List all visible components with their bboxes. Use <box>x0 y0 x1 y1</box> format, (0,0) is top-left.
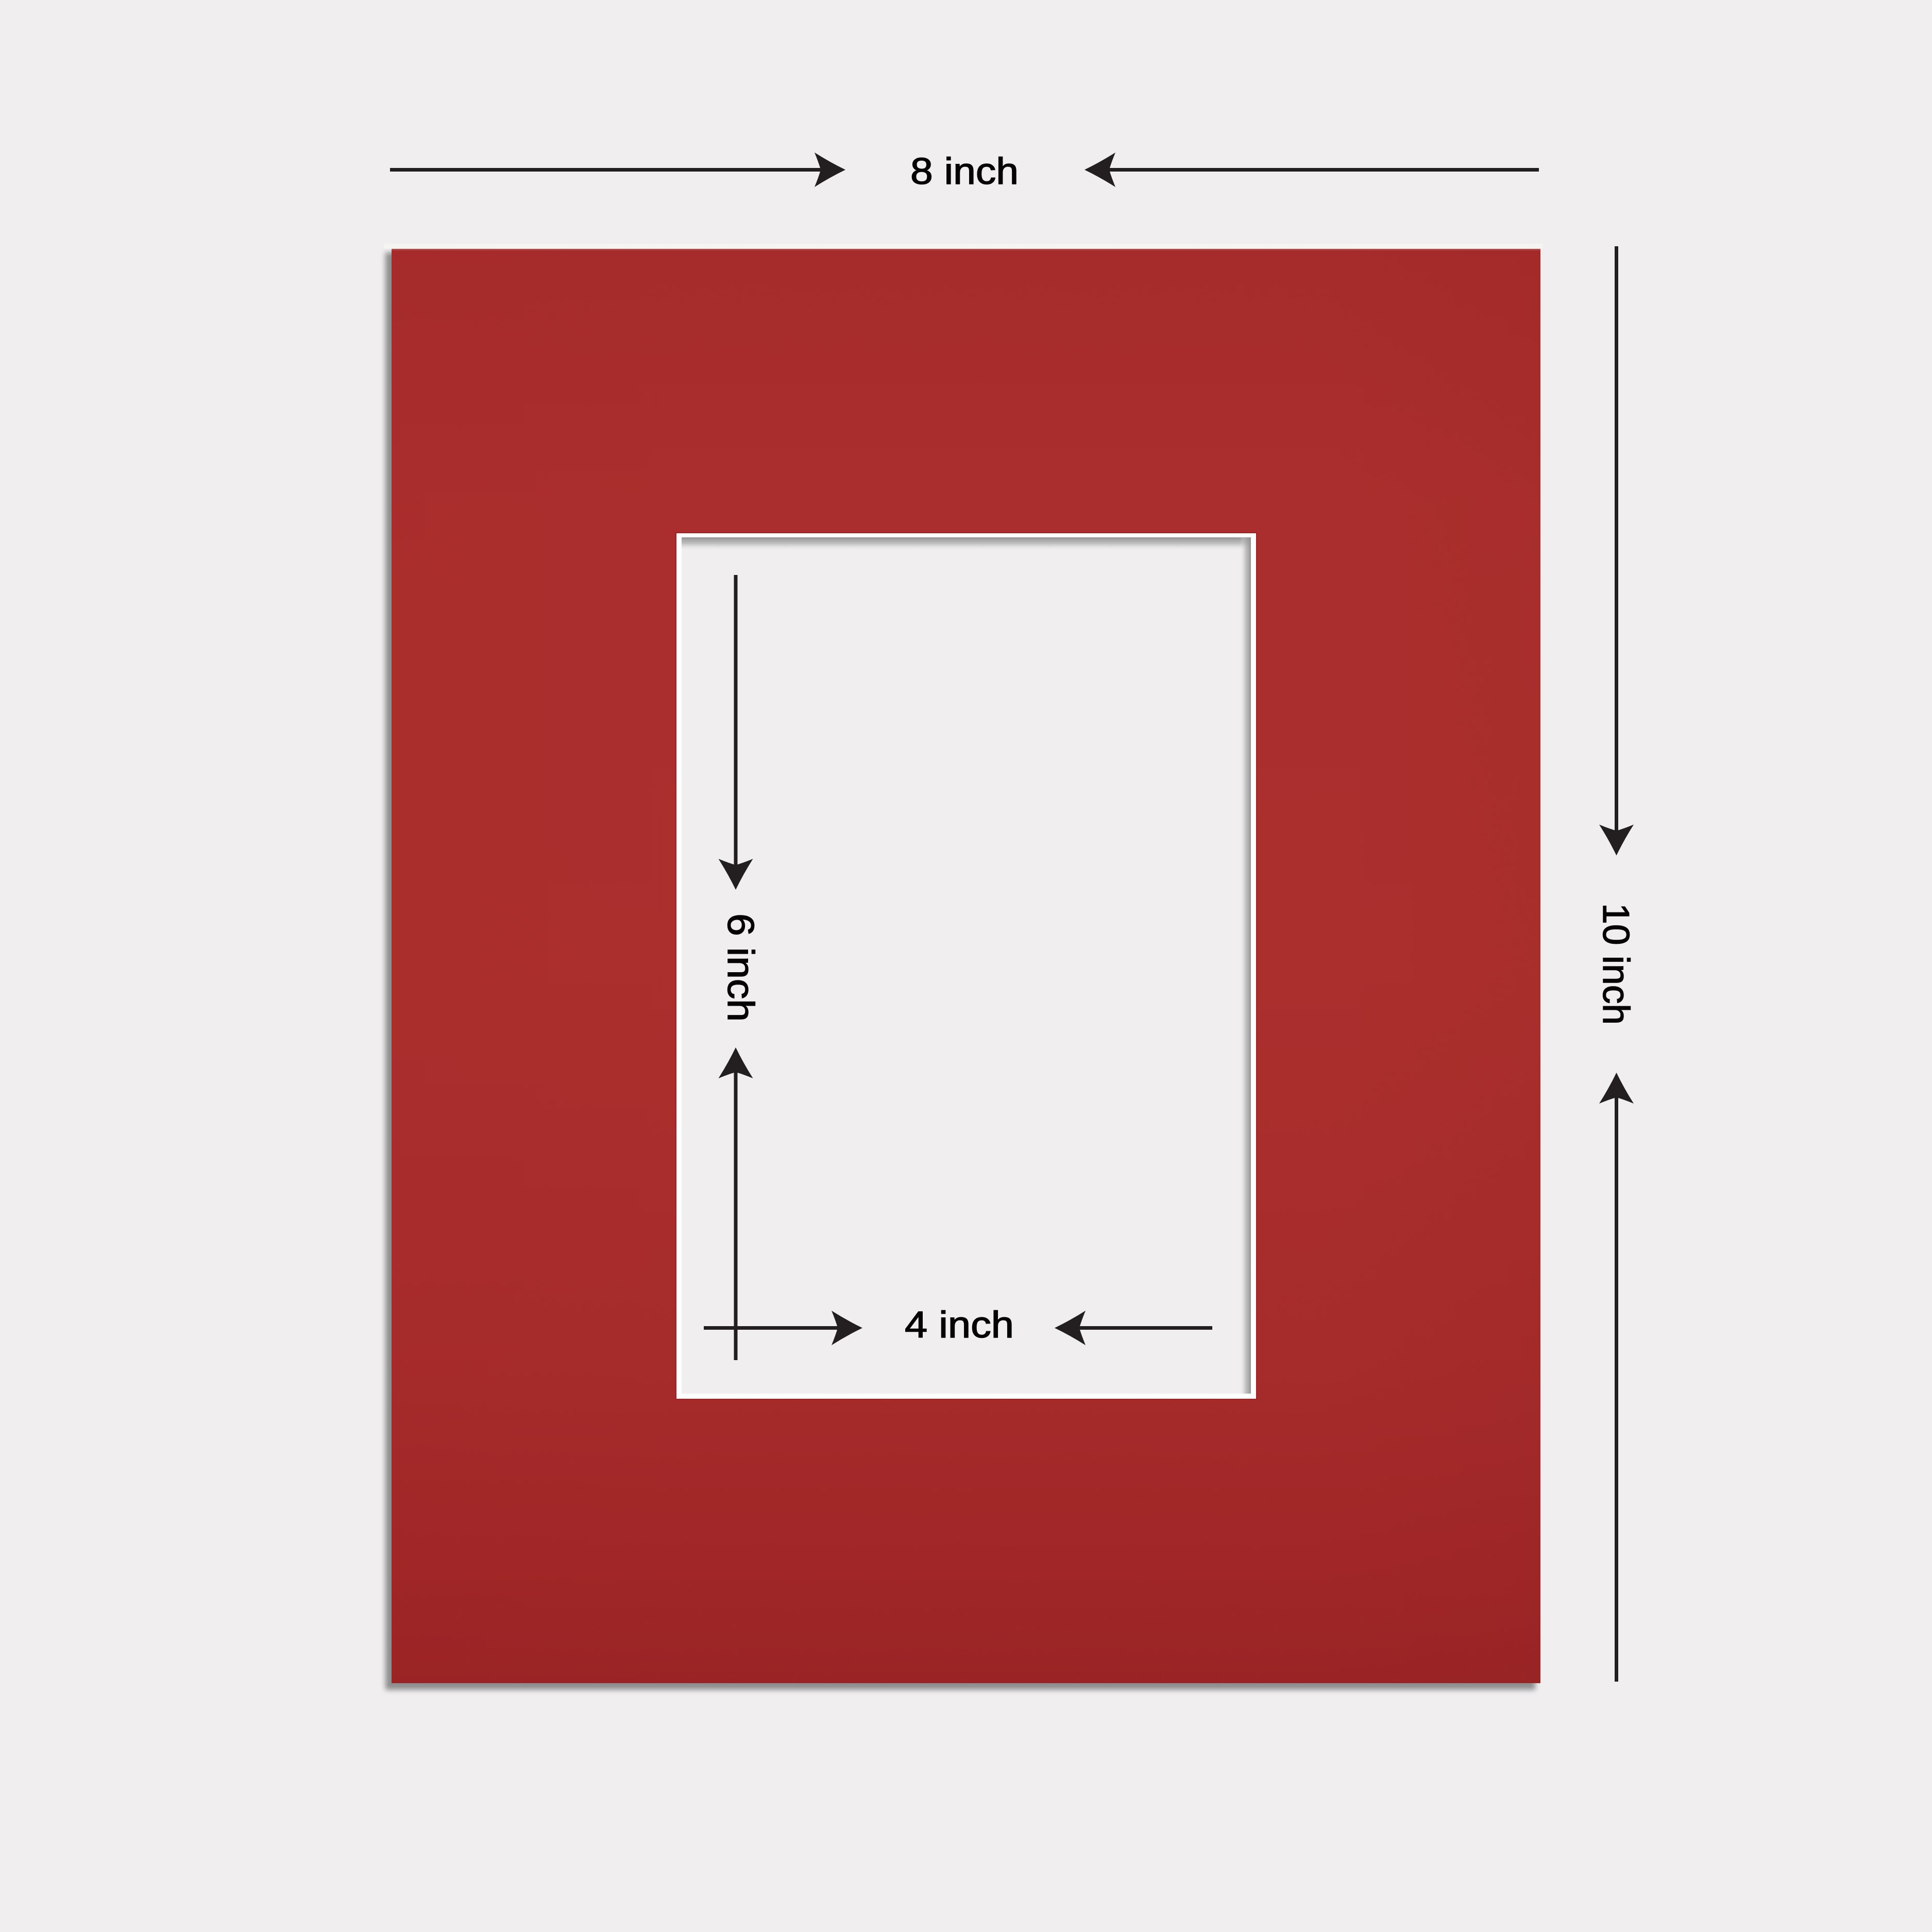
window right inner shadow <box>1240 537 1251 1394</box>
opening: bevel cut and window <box>675 532 1257 1400</box>
arrow: 8 inch left, pointing right <box>390 152 845 187</box>
label: 4 inch: 4 inch <box>905 1304 1014 1346</box>
white bevel <box>676 533 1256 1399</box>
arrow: 6 inch upper, pointing down <box>718 575 753 890</box>
arrow: 10 inch lower, pointing up <box>1599 1073 1634 1682</box>
label: 8 inch: 8 inch <box>910 151 1019 192</box>
bevel dark outline <box>675 532 1257 1400</box>
mat side shading <box>392 249 1540 1683</box>
mat drop shadow <box>385 252 1535 1690</box>
window backing <box>682 537 1251 1394</box>
arrow: 4 inch left, pointing right <box>704 1311 862 1345</box>
panel: red photo mat board <box>384 244 1543 1690</box>
arrow: 6 inch lower, pointing up <box>718 1047 753 1360</box>
arrow: 10 inch upper, pointing down <box>1599 246 1634 855</box>
label: 10 inch: 10 inch <box>1595 903 1636 1025</box>
arrow: 8 inch right, pointing left <box>1084 152 1539 187</box>
mat top highlight <box>392 249 1540 250</box>
mat light halo on top edge <box>384 244 1543 249</box>
mat paper texture <box>392 249 1540 1683</box>
label: 6 inch: 6 inch <box>720 913 761 1022</box>
arrow: 4 inch right, pointing left <box>1055 1311 1212 1345</box>
mat red surface <box>392 249 1540 1683</box>
window top inner shadow <box>682 537 1251 551</box>
